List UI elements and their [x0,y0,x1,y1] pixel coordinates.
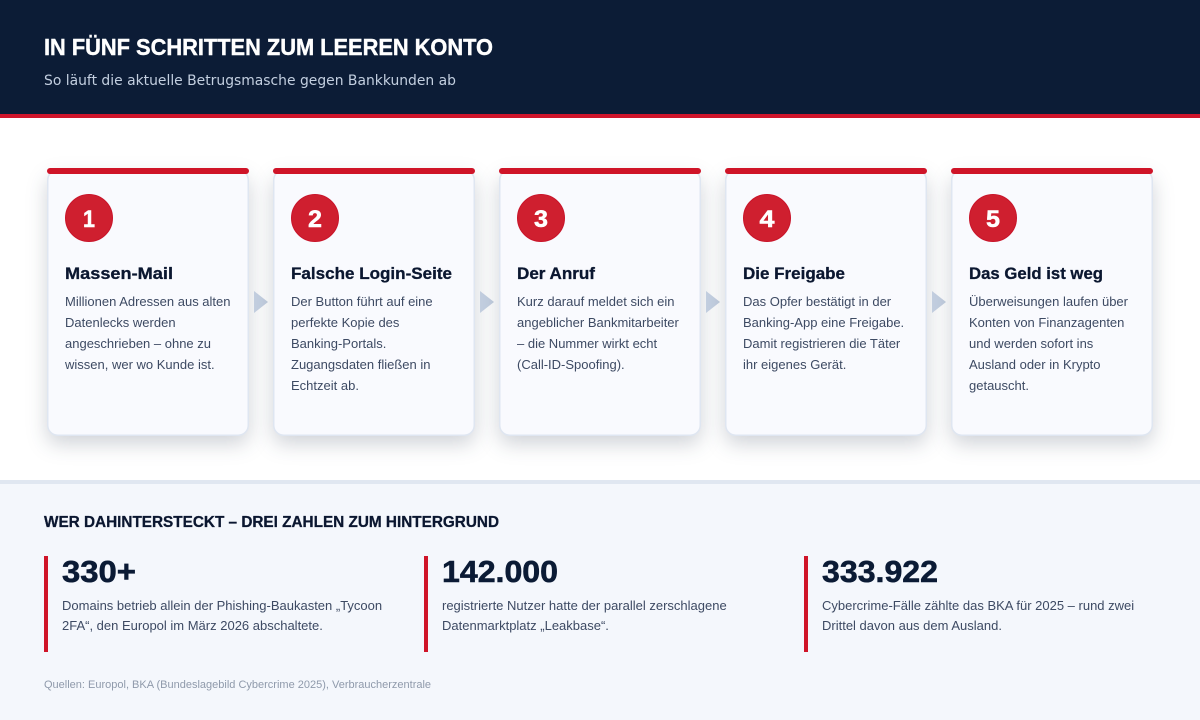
step title: Das Geld ist weg [969,265,1103,283]
icon: number 1: 1 [83,206,95,233]
panel: background facts [0,480,1200,720]
step text [969,294,1129,393]
stat: 142.000: Datenmarktplatz „Leakbase“. [442,618,609,633]
stat: 333.922: Drittel davon aus dem Ausland. [822,618,1002,633]
title: IN FÜNF SCHRITTEN ZUM LEEREN KONTO [44,34,493,60]
step text [291,294,433,393]
icon: number 4: 4 [760,206,775,233]
panel: step 5 [951,168,1153,435]
icon: number 4 [744,194,790,242]
icon: number 2: 2 [308,206,322,233]
panel: step 2 [273,168,475,435]
step text: Millionen Adressen aus alten [65,294,230,309]
stat: 142.000 [424,554,727,652]
step text [64,294,230,372]
stat: 333.922 [804,554,1134,652]
icon: number 2 [292,194,338,242]
step text [517,294,680,372]
arrow [932,291,946,313]
panel: step 1 [47,168,249,435]
step text: (Call-ID-Spoofing). [517,357,625,372]
stat: 333.922: 333.922 [822,554,938,589]
icon: number 3: 3 [534,206,548,233]
step text: Überweisungen laufen über [969,294,1129,309]
step text: wissen, wer wo Kunde ist. [64,357,215,372]
stat: 330+: 330+ [62,554,136,589]
section heading: WER DAHINTERSTECKT – DREI ZAHLEN ZUM HINTERGRUND [44,514,499,531]
step text: Datenlecks werden [65,315,176,330]
step text: und werden sofort ins [969,336,1094,351]
stat: 330+: Domains betrieb allein der Phishing-Baukasten „Tycoon [62,598,382,613]
step text: angeschrieben – ohne zu [65,336,211,351]
step text: getauscht. [969,378,1029,393]
step text [743,294,904,372]
icon: number 1 [66,194,112,242]
icon: number 3 [518,194,564,242]
stat: 333.922: Cybercrime-Fälle zählte das BKA für 2025 – rund zwei [822,598,1134,613]
step text: ihr eigenes Gerät. [743,357,846,372]
step text: Banking-Portals. [291,336,386,351]
icon: number 5 [970,194,1016,242]
step title: Massen-Mail [65,265,173,283]
arrow [254,291,268,313]
panel: step 4 [725,168,927,435]
step text: Banking-App eine Freigabe. [743,315,904,330]
step title: Falsche Login-Seite [291,265,452,283]
subtitle: So läuft die aktuelle Betrugsmasche gegen Bankkunden ab [44,73,456,89]
step text: Echtzeit ab. [291,378,359,393]
icon: number 5: 5 [986,206,1000,233]
step text: Das Opfer bestätigt in der [743,294,892,309]
stat: 142.000: 142.000 [442,554,558,589]
header band [0,0,1200,118]
stat: 142.000: registrierte Nutzer hatte der parallel zerschlagene [442,598,727,613]
step text: angeblicher Bankmitarbeiter [517,315,680,330]
step text: – die Nummer wirkt echt [517,336,658,351]
step text: Der Button führt auf eine [291,294,433,309]
panel: step 3 [499,168,701,435]
step title: Die Freigabe [743,265,845,283]
arrow [480,291,494,313]
step title: Der Anruf [517,265,596,283]
step text: Damit registrieren die Täter [743,336,901,351]
sources: Quellen: Europol, BKA (Bundeslagebild Cybercrime 2025), Verbraucherzentrale [44,679,431,691]
step text: Ausland oder in Krypto [969,357,1101,372]
step text: Kurz darauf meldet sich ein [517,294,675,309]
step text: Konten von Finanzagenten [969,315,1124,330]
step text: Zugangsdaten fließen in [291,357,430,372]
stat: 330+: 2FA“, den Europol im März 2026 abschaltete. [62,618,323,633]
stat: 330+ [44,554,382,652]
arrow [706,291,720,313]
step text: perfekte Kopie des [291,315,400,330]
